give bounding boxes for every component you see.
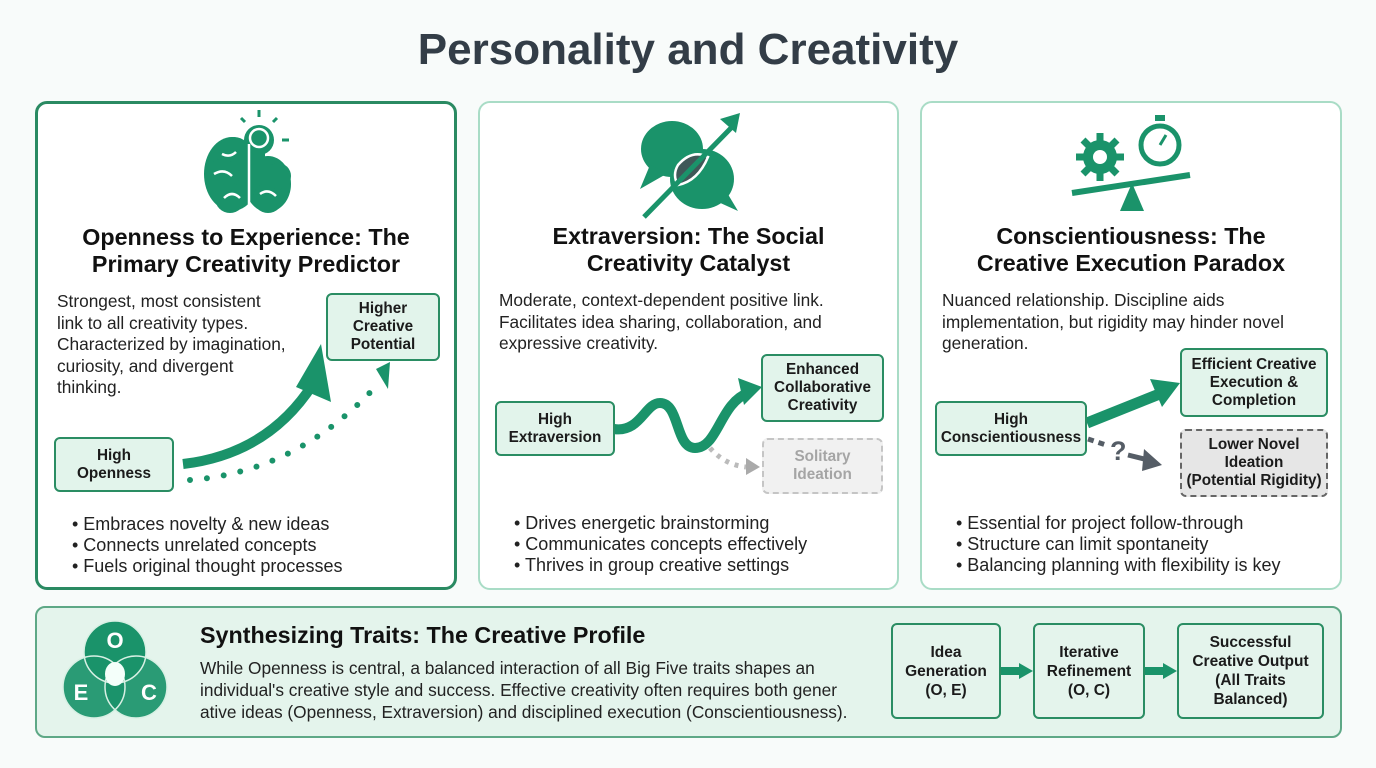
heading: Conscientiousness: The — [996, 223, 1266, 249]
text block: expressive creativity. — [499, 333, 658, 353]
box: iterative refinement: Refinement — [1047, 662, 1131, 680]
box: high extraversion: High — [538, 410, 572, 428]
box: successful output — [1177, 623, 1324, 719]
box: higher potential: Potential — [351, 336, 415, 353]
box: enhanced collaborative: Creativity — [788, 397, 857, 414]
box: iterative refinement: (O, C) — [1068, 682, 1110, 698]
box: enhanced collaborative: Collaborative — [774, 379, 871, 396]
box: successful output: Creative Output — [1192, 653, 1309, 670]
heading — [82, 224, 410, 277]
box: high conscientiousness: High — [994, 410, 1028, 428]
heading — [977, 223, 1285, 276]
bullets: • Connects unrelated concepts — [72, 535, 316, 555]
box: higher potential: Creative — [353, 318, 413, 335]
text block: ative ideas (Openness, Extraversion) and disciplined execution (Conscientiousness). — [200, 702, 847, 722]
panel: extraversion — [478, 101, 899, 590]
heading: Extraversion: The Social — [553, 223, 824, 249]
heading — [553, 223, 824, 276]
text block: Strongest, most consistent — [57, 291, 261, 311]
box: high openness: High — [97, 446, 131, 464]
box: high extraversion — [495, 401, 615, 456]
box: efficient execution — [1180, 348, 1328, 417]
box: lower novel ideation — [1180, 429, 1328, 497]
bullets: • Thrives in group creative settings — [514, 555, 789, 575]
box: higher potential: Higher — [359, 300, 407, 317]
box: high conscientiousness — [935, 401, 1087, 456]
box: efficient execution: Execution & — [1210, 374, 1298, 390]
flow chart — [891, 623, 1324, 719]
arrow — [1001, 663, 1177, 679]
box: high conscientiousness: Conscientiousness — [941, 428, 1081, 446]
icon: OEC venn: E — [74, 680, 88, 705]
icon: OEC venn: C — [141, 680, 157, 705]
panel: openness — [35, 101, 457, 590]
bullets: • Fuels original thought processes — [72, 556, 342, 576]
text block: link to all creativity types. — [57, 312, 248, 332]
heading: Synthesizing Traits: The Creative Profile — [200, 622, 645, 648]
bullets — [72, 514, 342, 576]
bullets: • Embraces novelty & new ideas — [72, 514, 329, 534]
icon: speech bubbles with arrow — [640, 113, 740, 219]
icon: gear, stopwatch, balance — [1072, 115, 1190, 211]
box: enhanced collaborative: Enhanced — [786, 361, 859, 378]
arrows — [615, 378, 761, 475]
bullets: • Communicates concepts effectively — [514, 534, 807, 554]
text block — [499, 290, 824, 353]
box: successful output: (All Traits — [1215, 672, 1286, 689]
text block: generation. — [942, 333, 1028, 353]
icon: brain with lightbulb — [204, 110, 291, 213]
box: idea generation: (O, E) — [925, 682, 967, 698]
icon: OEC venn — [62, 620, 168, 718]
bullets: • Drives energetic brainstorming — [514, 513, 769, 533]
box: iterative refinement: Iterative — [1059, 644, 1119, 660]
text block: Moderate, context-dependent positive link. — [499, 290, 824, 310]
title: Personality and Creativity — [418, 25, 958, 74]
text block: individual's creative style and success. Effective creativity often requires both gener — [200, 680, 837, 700]
bullets — [956, 513, 1280, 575]
box: solitary ideation: Solitary — [794, 448, 851, 465]
icon: OEC venn: O — [106, 628, 124, 653]
bullets: • Balancing planning with flexibility is key — [956, 555, 1280, 575]
box: high extraversion: Extraversion — [509, 428, 601, 446]
box: idea generation: Generation — [905, 662, 987, 680]
text block — [942, 290, 1284, 353]
box: lower novel ideation: Lower Novel — [1209, 436, 1299, 453]
text block: thinking. — [57, 377, 121, 397]
arrows — [1087, 379, 1180, 471]
box: successful output: Successful — [1210, 634, 1291, 651]
box: lower novel ideation: (Potential Rigidity) — [1186, 472, 1322, 489]
box: solitary ideation — [762, 438, 883, 494]
bullets — [514, 513, 808, 575]
box: high openness: Openness — [77, 464, 151, 482]
heading: Primary Creativity Predictor — [92, 251, 400, 277]
box: successful output: Balanced) — [1213, 691, 1288, 708]
box: efficient execution: Completion — [1212, 392, 1296, 408]
arrows: ? — [1110, 436, 1126, 466]
panel: conscientiousness — [920, 101, 1342, 590]
box: idea generation — [891, 623, 1001, 719]
bullets: • Essential for project follow-through — [956, 513, 1243, 533]
box: iterative refinement — [1033, 623, 1145, 719]
panel: synthesis — [35, 606, 1342, 738]
text block: Characterized by imagination, — [57, 334, 286, 354]
bullets: • Structure can limit spontaneity — [956, 534, 1208, 554]
box: high openness — [54, 437, 174, 492]
box: solitary ideation: Ideation — [793, 466, 852, 483]
heading: Creative Execution Paradox — [977, 250, 1285, 276]
text block — [57, 291, 286, 397]
text block: Facilitates idea sharing, collaboration, and — [499, 312, 822, 332]
box: idea generation: Idea — [930, 644, 962, 660]
text block: While Openness is central, a balanced interaction of all Big Five traits shapes an — [200, 658, 815, 678]
heading: Openness to Experience: The — [82, 224, 410, 250]
text block: curiosity, and divergent — [57, 356, 233, 376]
box: enhanced collaborative — [761, 354, 884, 422]
text block: Nuanced relationship. Discipline aids — [942, 290, 1224, 310]
heading: Creativity Catalyst — [587, 250, 790, 276]
text block — [200, 658, 847, 722]
text block: implementation, but rigidity may hinder novel — [942, 312, 1284, 332]
box: lower novel ideation: Ideation — [1225, 454, 1283, 471]
box: higher potential — [326, 293, 440, 361]
arrows — [182, 344, 390, 483]
box: efficient execution: Efficient Creative — [1192, 356, 1316, 372]
